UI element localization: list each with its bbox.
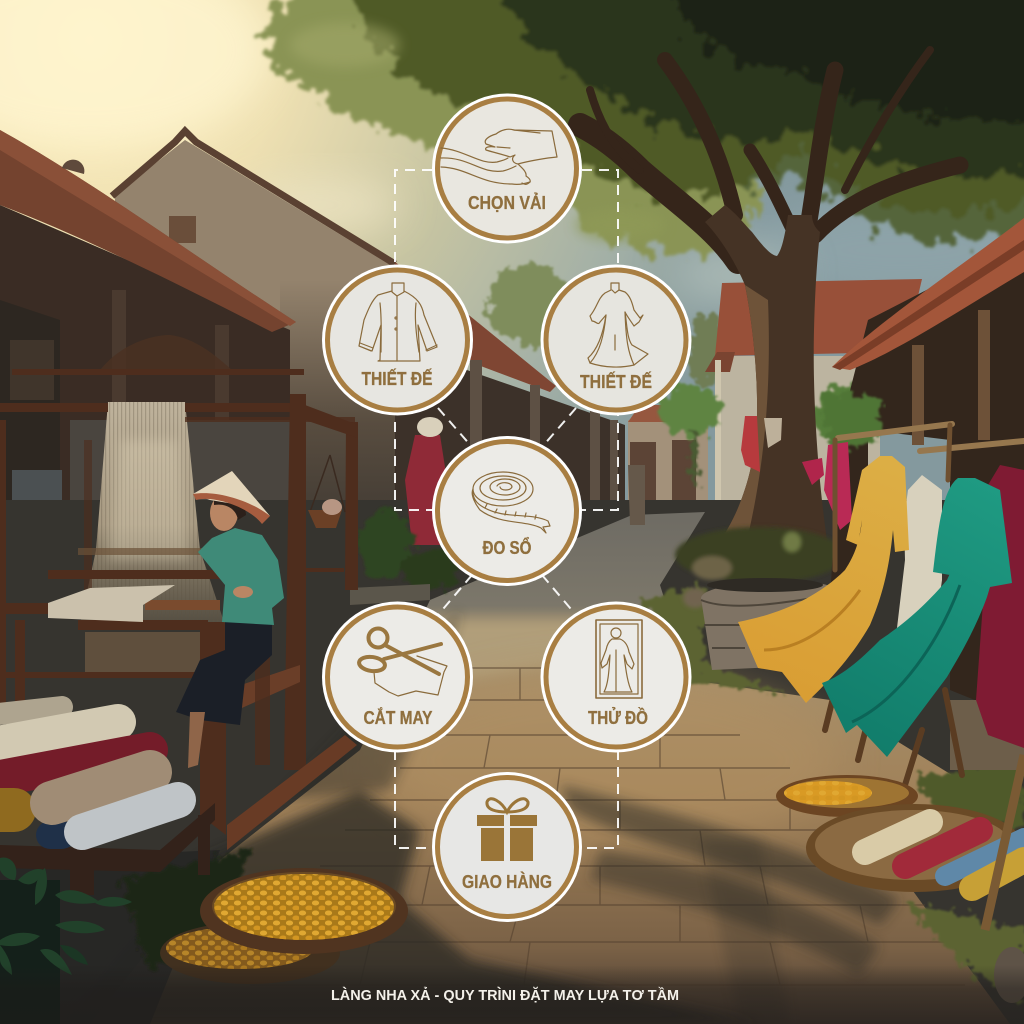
hat brim <box>193 493 270 524</box>
building: right back house <box>705 279 922 505</box>
garden stone edging <box>350 584 430 605</box>
step 5: cắt may <box>322 602 473 752</box>
tropical plants <box>660 384 888 490</box>
legs <box>188 712 205 768</box>
icon: gift box <box>477 799 537 861</box>
clouds and sun glow <box>0 0 1024 305</box>
right wooden house <box>830 218 1024 770</box>
label: GIAO HÀNG <box>462 871 552 892</box>
label: CẮT MAY <box>364 707 432 728</box>
step 3: thiết kế (áo dài) <box>540 264 692 416</box>
sky <box>0 0 1024 620</box>
loom decorative crest <box>100 335 232 370</box>
rocks and moss around tree base <box>675 527 845 608</box>
yellow dress fold <box>764 590 860 650</box>
warp threads <box>80 402 225 625</box>
caption: LÀNG NHA XẢ - QUY TRÌNI ĐẶT MAY LỰA TƠ TẦM <box>331 987 679 1004</box>
label: CHỌN VẢI <box>468 192 546 213</box>
hand <box>233 586 253 598</box>
label: ĐO SỔ <box>482 537 532 558</box>
paving stone joints <box>250 668 965 985</box>
conical hat <box>193 471 270 516</box>
label: THIẾT ĐẾ <box>580 371 652 392</box>
clothes hanging on tree <box>741 416 852 530</box>
step 6: thử đồ <box>540 602 692 752</box>
left building <box>0 130 296 610</box>
sunlit leaves <box>290 23 400 67</box>
fabric rolls left <box>0 707 178 835</box>
teal ao dai <box>822 478 1012 757</box>
face <box>210 495 238 531</box>
woven cloth on loom <box>48 585 175 622</box>
tree trunk and roots <box>705 205 828 548</box>
building: far house <box>628 405 708 502</box>
distant trees <box>488 263 723 385</box>
red dress <box>976 465 1024 748</box>
icon: mirror with figure <box>596 620 642 698</box>
large tray with fabric rolls right <box>806 804 1024 892</box>
white dress <box>895 475 942 645</box>
icon: jacket outline <box>359 283 437 361</box>
label: THỬ ĐỒ <box>588 707 648 728</box>
step 2: thiết kế (jacket) <box>322 264 473 416</box>
bench under fabric rolls <box>0 803 215 895</box>
hanging basket <box>308 455 345 528</box>
figures far down the path <box>628 465 645 525</box>
trousers <box>176 618 272 725</box>
weaver woman <box>176 471 284 768</box>
loom frame <box>0 369 358 850</box>
silk cocoon basket large <box>200 868 408 954</box>
building: tan house with gable <box>112 131 400 520</box>
villager in red at veranda <box>405 417 447 545</box>
warp thread lines <box>80 402 225 625</box>
shadows on the ground <box>0 610 900 1024</box>
caption dark band <box>0 965 1024 1024</box>
leaning bamboo pole <box>985 755 1024 930</box>
dress rack poles <box>825 424 1024 785</box>
tree branches <box>580 50 960 262</box>
shrubs near loom <box>357 509 458 590</box>
basket of cocoons right <box>776 775 918 817</box>
teal blouse <box>198 528 284 625</box>
icon: scissors <box>358 628 441 674</box>
dashed connector lines <box>395 170 618 848</box>
step 1: chọn vải <box>432 94 582 244</box>
icon: hand touching fabric <box>441 129 557 184</box>
hair <box>214 494 246 520</box>
building: long roof and veranda <box>395 262 625 525</box>
lower cloth <box>85 632 200 672</box>
loom <box>0 335 358 850</box>
teal dress fold <box>852 585 960 722</box>
step 4: đo số <box>432 436 582 586</box>
warp highlights <box>108 440 190 560</box>
foreground leaves bottom left <box>0 857 132 1024</box>
label: THIẾT ĐẾ <box>362 368 432 389</box>
tree canopy <box>262 0 1024 257</box>
ground and stone path <box>0 500 1024 1024</box>
rock bottom right <box>994 947 1024 1003</box>
yellow ao dai <box>738 456 909 703</box>
step 7: giao hàng <box>432 772 582 922</box>
grass patches <box>120 585 1024 1000</box>
icon: fabric <box>374 656 447 696</box>
stone well <box>701 578 835 670</box>
icon: áo dài outline <box>588 283 648 367</box>
silk cocoon basket small <box>160 922 340 984</box>
icon: measuring tape <box>472 472 550 533</box>
plant behind rack <box>820 395 880 450</box>
